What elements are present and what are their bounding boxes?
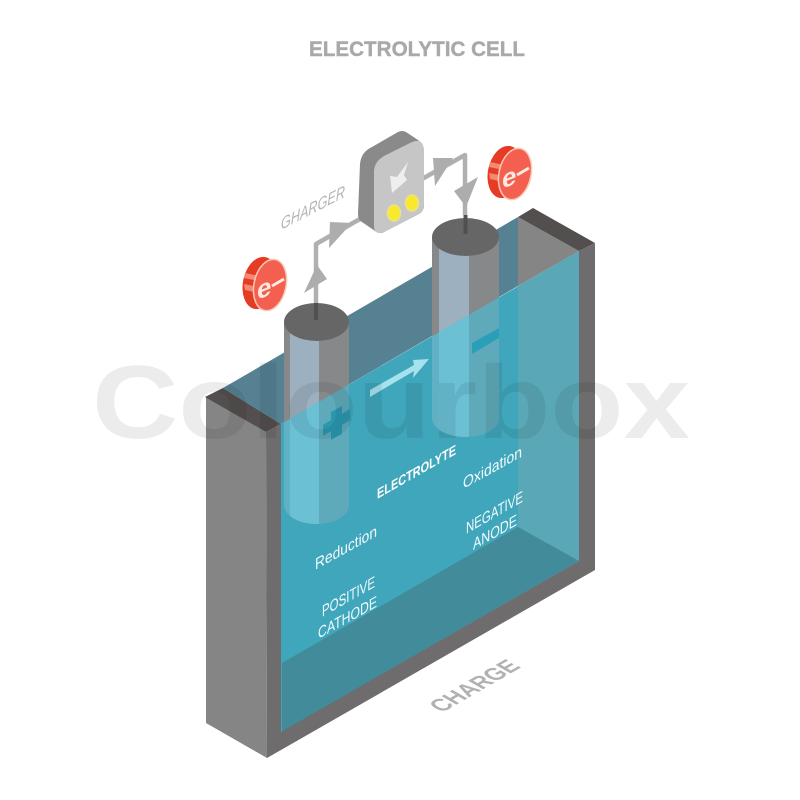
wire: cathode to charger: [304, 219, 360, 320]
electrolyte front: [281, 251, 579, 732]
label: cathode: CATHODE: [318, 592, 377, 643]
wire: charger to anode: [422, 155, 478, 234]
tank top cap right: [518, 208, 595, 251]
electrolytic cell tank: [205, 208, 595, 758]
label: positive: POSITIVE: [322, 572, 375, 621]
tank inner right wall above electrolyte: [518, 217, 579, 286]
charger label: GHARGER: [281, 182, 345, 234]
icon: electron coin right: [483, 143, 536, 203]
tank floor: [282, 527, 579, 732]
icon: electron coin right: e: [502, 160, 516, 195]
label: electrolyte: ELECTROLYTE: [377, 442, 456, 503]
icon: electron coin left: e: [257, 271, 271, 306]
label: oxidation: Oxidation: [463, 442, 522, 493]
icon: yellow button left: [388, 205, 400, 221]
label: charge: CHARGE: [423, 656, 527, 716]
arrow: ion flow: [370, 359, 429, 397]
tank front frame: [266, 243, 595, 758]
tank top cap left: [205, 388, 281, 432]
title: ELECTROLYTIC CELL: [309, 38, 525, 61]
left cathode cylinder: [284, 303, 349, 532]
icon: yellow button right: [406, 195, 418, 211]
right anode cylinder: [432, 218, 499, 447]
icon: plus sign: [323, 406, 350, 440]
icon: minus sign: [472, 328, 499, 354]
icon: electron coin left: [238, 254, 291, 314]
icon: lightning bolt: [390, 162, 408, 193]
label: negative: NEGATIVE: [466, 487, 523, 538]
watermark: Colourbox: [92, 345, 690, 461]
electrolyte right wall: [518, 251, 579, 561]
label: reduction: Reduction: [315, 521, 377, 574]
tank left side face: [206, 397, 267, 758]
label: anode: ANODE: [473, 510, 517, 554]
icon: charger device: [358, 131, 424, 233]
tank back wall above electrolyte: [223, 217, 518, 424]
